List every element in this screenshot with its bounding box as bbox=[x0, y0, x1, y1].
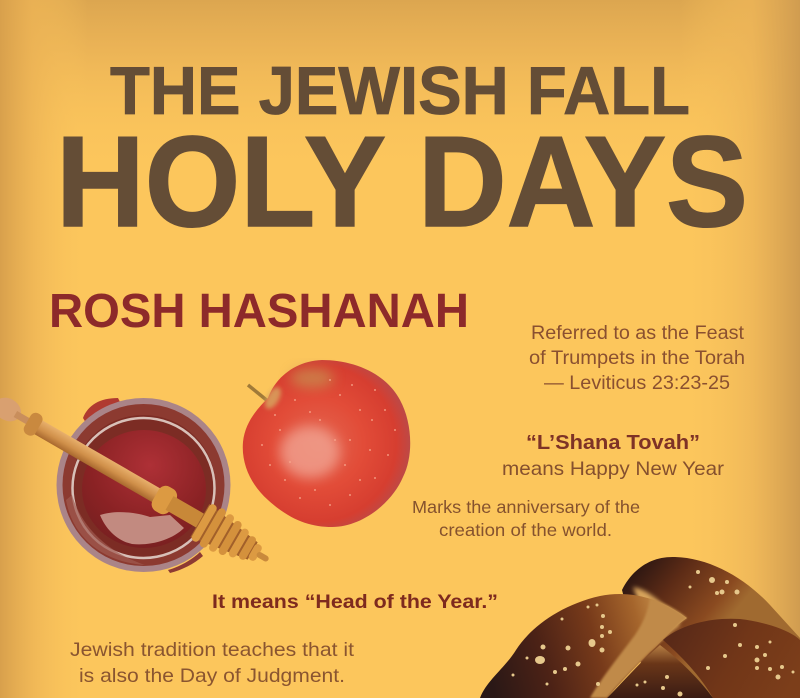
icon: honey dipper bbox=[0, 383, 279, 579]
text: L'Shana Tovah: “L’Shana Tovah” bbox=[526, 432, 700, 454]
icon: apple bbox=[243, 360, 410, 527]
text: Feast of Trumpets: Referred to as the Feast bbox=[531, 322, 745, 344]
text: anniversary of creation: Marks the anniversary of the bbox=[412, 497, 640, 517]
text: Head of the Year: It means “Head of the Year.” bbox=[212, 592, 498, 613]
icon: honey jar bbox=[56, 398, 230, 573]
text: Feast of Trumpets: of Trumpets in the Torah bbox=[529, 347, 745, 369]
icon: challah bread bbox=[480, 557, 800, 698]
text: L'Shana Tovah: means Happy New Year bbox=[502, 458, 725, 480]
text: Day of Judgment: Jewish tradition teaches that it bbox=[70, 639, 355, 661]
title: HOLY DAYS bbox=[56, 110, 748, 254]
title bbox=[56, 53, 748, 254]
text: Feast of Trumpets bbox=[529, 322, 745, 394]
text: Feast of Trumpets: — Leviticus 23:23-25 bbox=[544, 372, 730, 394]
text: anniversary of creation: creation of the world. bbox=[439, 520, 612, 540]
heading: Rosh Hashanah: ROSH HASHANAH bbox=[49, 285, 469, 338]
text: Day of Judgment: is also the Day of Judgment. bbox=[79, 665, 345, 687]
text: L'Shana Tovah bbox=[502, 432, 725, 480]
title: THE JEWISH FALL bbox=[110, 53, 690, 129]
text: anniversary of creation bbox=[412, 497, 640, 540]
text: Day of Judgment bbox=[70, 639, 355, 687]
